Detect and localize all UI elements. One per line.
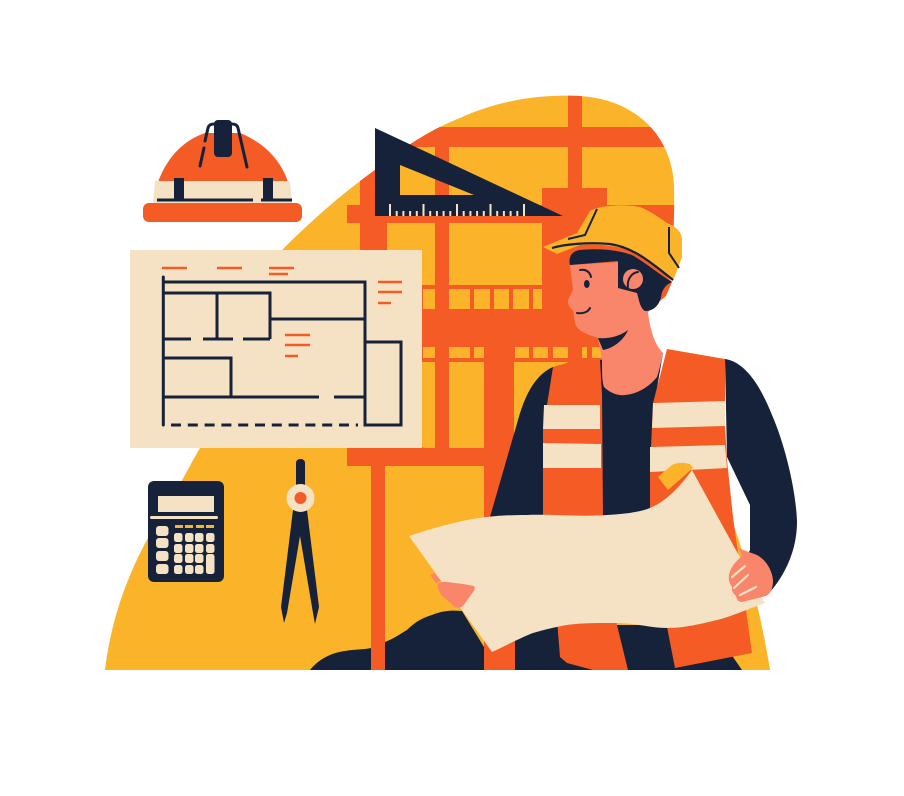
vest left stripes — [543, 405, 600, 429]
drawing compass — [281, 459, 319, 624]
background blob — [105, 96, 770, 670]
left arm — [480, 365, 570, 540]
hat top lines — [200, 124, 247, 167]
tower leg over mound — [371, 640, 385, 670]
paper back fold — [658, 463, 693, 490]
ear — [623, 269, 643, 289]
finger gaps — [732, 566, 756, 595]
hard hat (left) — [143, 120, 302, 222]
navy mound — [310, 611, 484, 670]
illustration: construction engineer with blueprint — [105, 96, 797, 670]
orange under helmet — [655, 265, 672, 305]
hat dome — [158, 133, 288, 182]
smile — [577, 308, 590, 313]
helmet lines — [552, 209, 679, 280]
compass legs — [281, 510, 319, 624]
vest right panel — [650, 349, 752, 668]
lower torso — [515, 625, 742, 670]
set square ruler — [375, 128, 563, 216]
calculator — [148, 481, 224, 582]
helmet — [543, 205, 682, 281]
floor plan walls — [163, 277, 401, 425]
head — [568, 262, 648, 338]
neck and chest — [598, 300, 663, 395]
left hand thumb — [430, 573, 441, 583]
left hand — [438, 582, 475, 608]
right hand — [729, 548, 773, 602]
compass hinge — [286, 484, 314, 512]
hat band — [153, 181, 292, 203]
beard — [598, 330, 628, 350]
shirt centre — [600, 353, 663, 530]
vest left panel — [543, 360, 628, 670]
vest right stripes — [652, 401, 725, 428]
calculator screen — [158, 496, 214, 512]
blueprint annotations — [162, 268, 402, 356]
eye and brow — [584, 280, 590, 288]
blueprint paper held — [409, 470, 765, 652]
right arm — [725, 359, 797, 592]
blueprint board — [130, 250, 422, 448]
ruler ticks — [390, 204, 524, 216]
engineer — [409, 205, 797, 670]
scaffold tower — [347, 90, 685, 670]
hat brim — [143, 203, 302, 222]
number keys — [156, 526, 214, 574]
yellow keys — [175, 525, 214, 528]
hat straps — [157, 120, 292, 202]
hair — [569, 249, 672, 311]
